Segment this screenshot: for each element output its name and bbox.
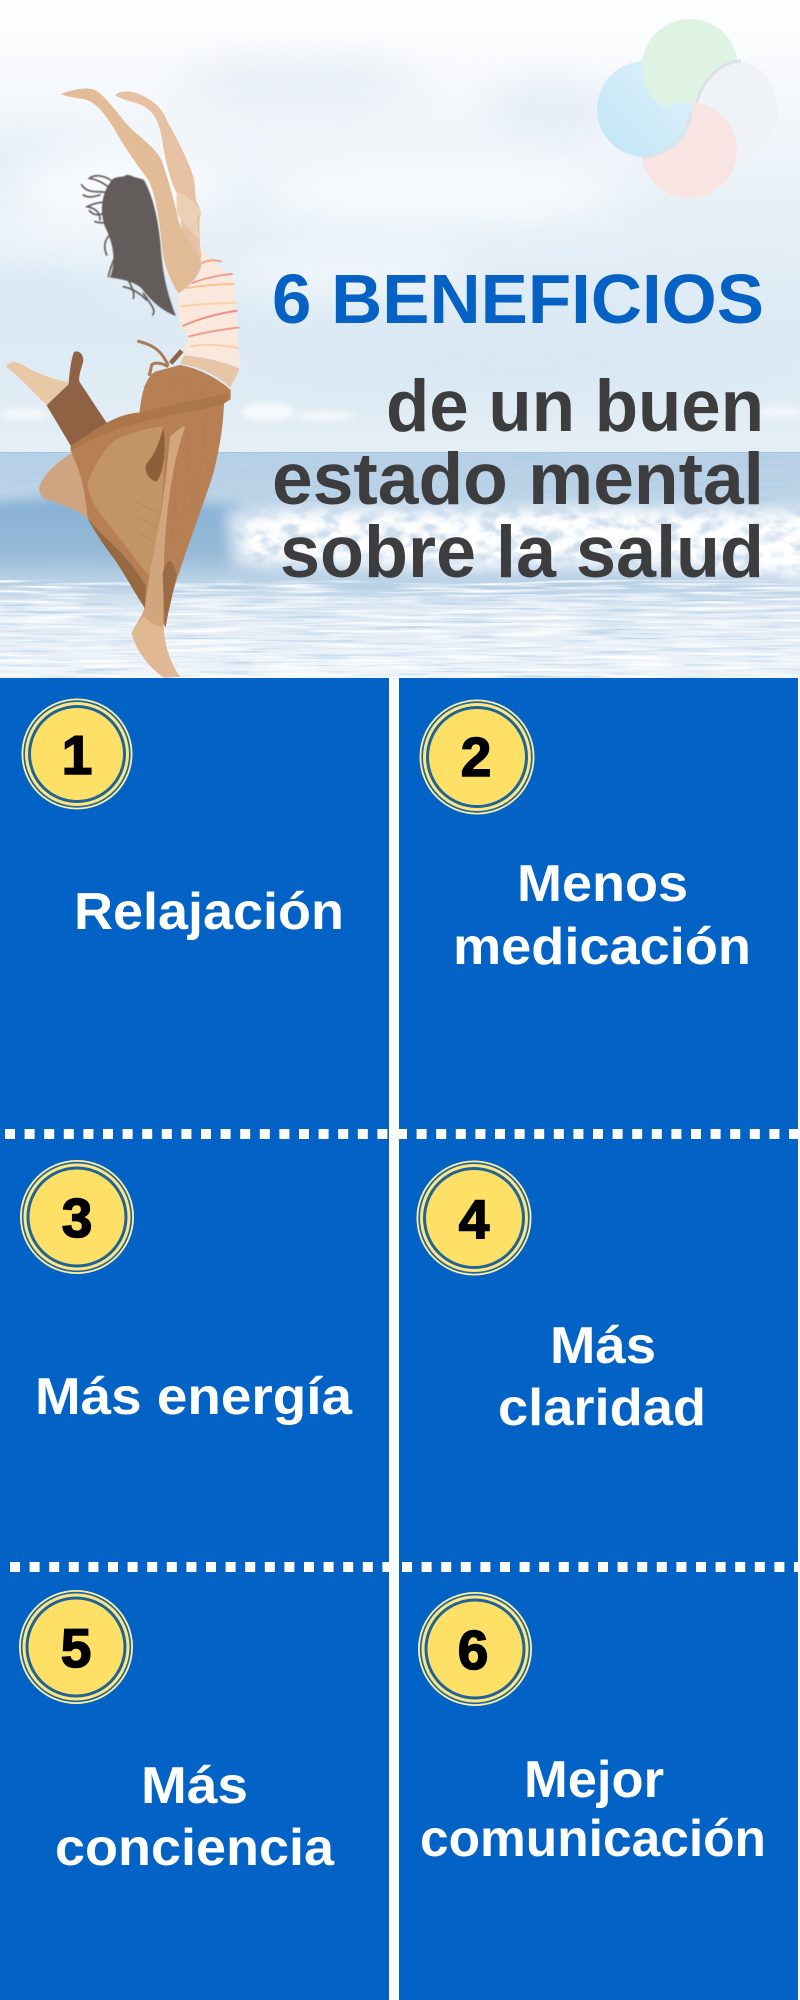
subheading: sobre la salud [280,512,764,593]
badge 5: 5 [61,1617,91,1679]
skirt body [71,365,231,627]
label 2: medicación [453,918,751,976]
hero photo: sky and sea [0,0,800,679]
title [272,260,764,593]
skirt ties [137,341,182,376]
face [177,192,201,240]
striped top [177,248,240,368]
badge 3 [20,1160,134,1274]
badge 1: 1 [62,724,92,786]
dotted divider 2 [10,1562,800,1572]
badge 2: 2 [461,726,491,788]
raised foot and leg [6,362,69,405]
midriff [180,355,239,387]
dancing woman figure [6,88,240,678]
dark hem [87,518,145,609]
badge 4: 4 [459,1188,490,1250]
benefit 4: más claridad [416,1160,706,1437]
badge 6: 6 [458,1619,488,1681]
subheading: de un buen [386,366,764,447]
arm, back [115,91,202,260]
upper body [61,88,240,387]
label 2 [453,855,751,976]
label 6: Mejor [524,1751,664,1809]
label 4 [498,1317,706,1437]
subheading [272,366,764,593]
label 4: Más [550,1317,656,1375]
benefit 2: menos medicación [420,700,751,976]
benefit 1: relajación [22,698,344,941]
label 4: claridad [498,1379,706,1437]
benefit 3: más energía [20,1160,353,1426]
label 3: Más energía [35,1368,353,1426]
subheading: estado mental [272,439,764,520]
lining [39,453,91,522]
label 5 [55,1757,335,1877]
logo: four overlapping pastel circles [597,19,745,198]
badge 1 [22,698,132,810]
badge 5 [19,1590,133,1704]
arm, front [61,88,202,293]
badge 4 [416,1160,532,1276]
lower body [6,351,231,678]
badge 6 [418,1592,532,1706]
label 1: Relajación [74,883,344,941]
hair [82,176,176,316]
label 6: comunicación [420,1810,766,1868]
heading: 6 beneficios: 6 BENEFICIOS [272,260,764,338]
fold shadow [146,427,165,482]
label 5: conciencia [55,1819,335,1877]
label 5: Más [141,1757,248,1815]
benefit 6: mejor comunicación [418,1592,766,1868]
benefit 5: más conciencia [19,1590,335,1877]
panel: blue grid background [0,678,798,2000]
standing leg [132,426,185,678]
label 2: Menos [517,855,688,913]
fold band [71,393,231,452]
label 6 [420,1751,766,1868]
fold lines [133,373,223,553]
dotted divider 1 [5,1129,800,1139]
inner panel [87,426,165,577]
foot [132,616,180,678]
badge 3: 3 [62,1187,92,1249]
badge 2 [420,700,534,814]
